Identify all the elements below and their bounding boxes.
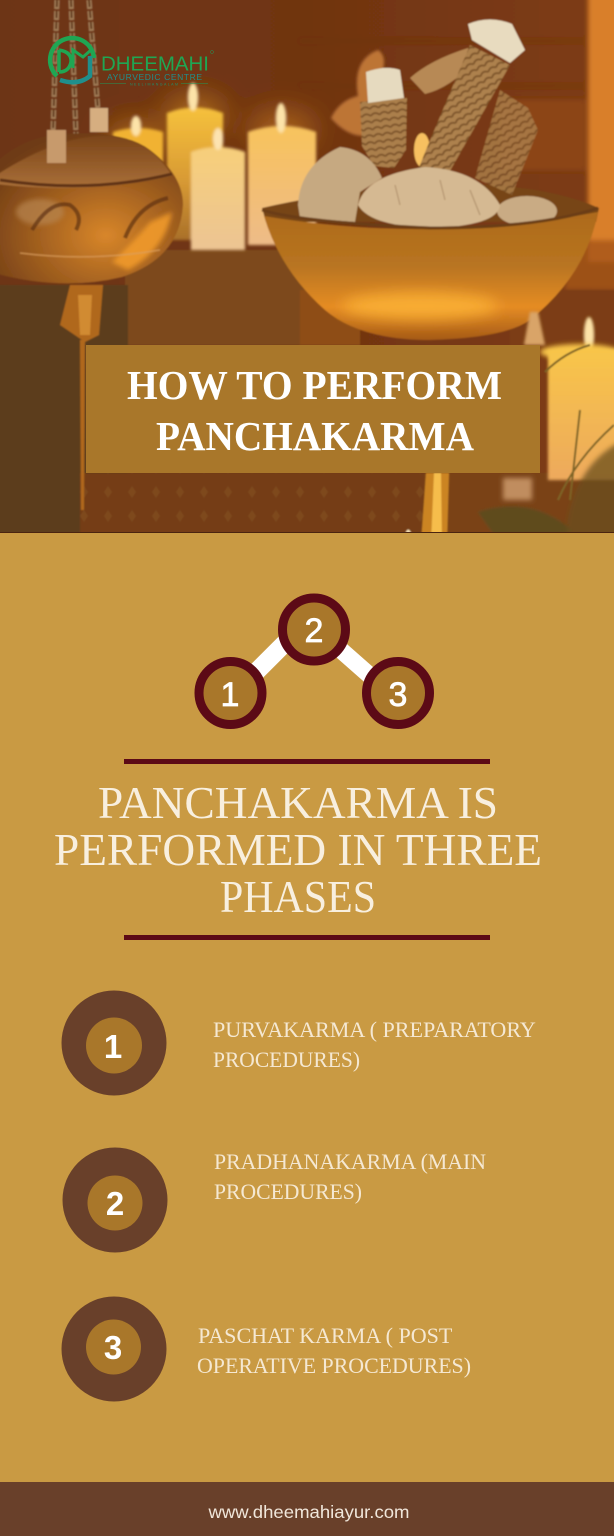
heading text: PANCHAKARMA IS	[98, 777, 498, 828]
badge 1: 1	[104, 1028, 122, 1065]
badge 2	[62, 1148, 168, 1252]
plant and spire below the title band	[403, 345, 614, 543]
phase 3 text: OPERATIVE PROCEDURES)	[197, 1353, 471, 1378]
photo backdrop wall	[0, 0, 614, 543]
badge 3: 3	[104, 1329, 122, 1366]
phase 3	[62, 1296, 471, 1402]
phase 2 text: PROCEDURES)	[214, 1179, 362, 1204]
node 3: 3	[389, 676, 407, 714]
phase 2	[62, 1148, 492, 1252]
node 2: 2	[305, 612, 323, 650]
badge 3	[62, 1296, 166, 1402]
badge 1	[62, 990, 166, 1096]
brass bowl	[262, 208, 598, 345]
node 1	[199, 662, 262, 724]
title text: HOW TO PERFORM	[127, 362, 502, 408]
heading block with rules	[54, 759, 554, 940]
herbal bundles	[298, 20, 557, 228]
brass hanging pot with chains	[0, 0, 183, 510]
right candle and flame	[540, 317, 614, 480]
badge 2: 2	[106, 1185, 124, 1222]
node 1: 1	[221, 676, 239, 714]
footer bar	[0, 1482, 614, 1536]
title band	[86, 345, 540, 473]
bowl back rim	[262, 184, 599, 222]
phase 1 text: PURVAKARMA ( PREPARATORY	[213, 1017, 536, 1042]
phase 2 text: PRADHANAKARMA (MAIN	[214, 1149, 486, 1174]
logo: Dheemahi Ayurvedic Centre	[50, 38, 214, 86]
hero bottom edge	[0, 532, 614, 533]
hero photo: candles, brass pot and herbal bundles	[0, 0, 614, 543]
blurred candles	[106, 83, 316, 250]
phase 1	[62, 990, 540, 1096]
node 2	[282, 598, 346, 661]
logo: Dheemahi Ayurvedic Centre: DHEEMAHI	[101, 54, 209, 76]
heading text: PERFORMED IN THREE	[54, 824, 542, 875]
heading text: PHASES	[220, 871, 376, 922]
node 3	[366, 662, 430, 724]
title text: PANCHAKARMA	[156, 413, 474, 459]
three phase diagram icon	[199, 598, 430, 724]
phase 1 text: PROCEDURES)	[213, 1047, 360, 1072]
logo: Dheemahi Ayurvedic Centre: NEELIMANGALAM	[130, 82, 178, 86]
phase 3 text: PASCHAT KARMA ( POST	[198, 1323, 453, 1348]
logo: Dheemahi Ayurvedic Centre: AYURVEDIC CENTRE	[107, 72, 202, 82]
website url: www.dheemahiayur.com	[207, 1502, 410, 1522]
